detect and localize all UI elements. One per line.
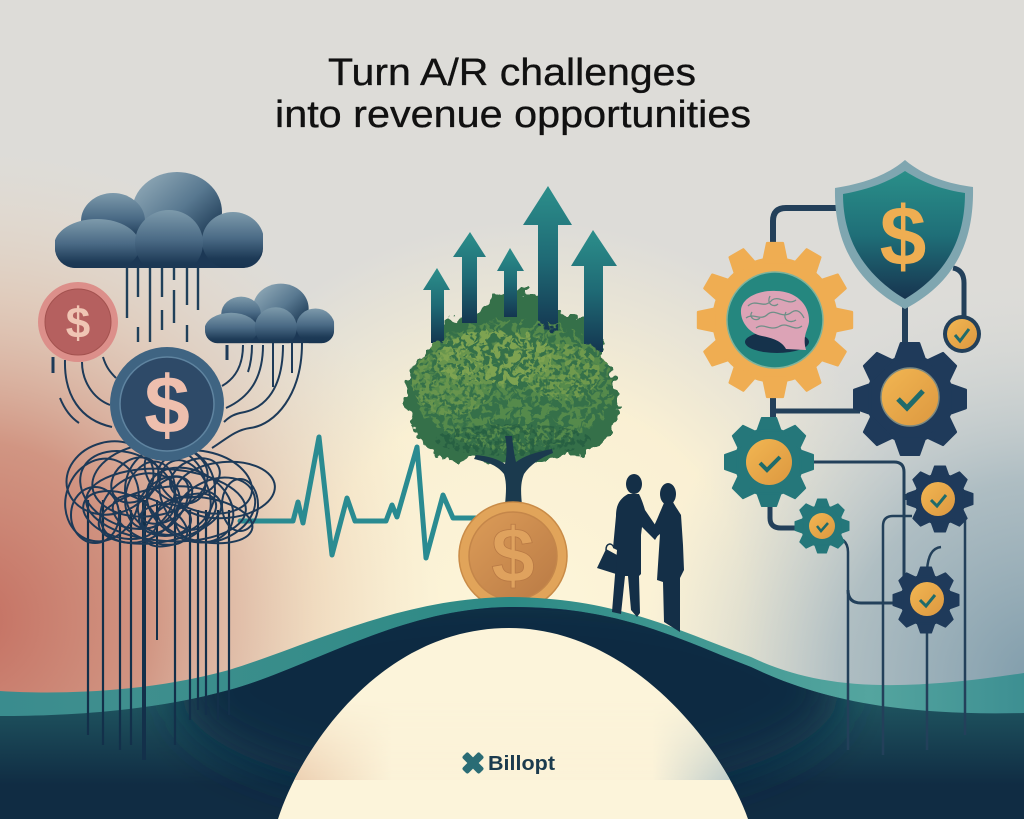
man [645, 483, 684, 632]
title [275, 52, 751, 136]
group: automation gears [698, 160, 981, 755]
vertical strings [88, 500, 229, 760]
connector wires [770, 208, 965, 755]
small teal check gear [795, 499, 849, 553]
rain under large cloud [127, 268, 198, 342]
group: debt tangle and clouds [38, 172, 335, 760]
icon: small storm cloud [204, 284, 335, 348]
growth arrows [423, 186, 617, 352]
icon: pink coin: $ [66, 299, 90, 348]
icon: gold coin: $ [491, 511, 535, 599]
tree canopy [405, 319, 618, 464]
title: Turn A/R challenges [328, 52, 696, 94]
icon: large navy coin [110, 347, 224, 461]
navy check gear [854, 343, 966, 455]
icon: logo cross [456, 746, 490, 780]
big brain gear [698, 243, 852, 397]
tree trunk [474, 436, 553, 505]
rolling hill [0, 580, 1024, 819]
canopy back [432, 290, 604, 388]
people silhouettes [597, 474, 684, 632]
scribble tangle [54, 432, 277, 557]
title: into revenue opportunities [275, 94, 751, 136]
icon: brain [741, 291, 809, 353]
heartbeat line [240, 437, 478, 558]
small check badge [943, 315, 981, 353]
logo: Billopt [456, 746, 555, 780]
icon: large navy coin: $ [144, 360, 190, 451]
teal band [0, 597, 1024, 730]
logo: Billopt: Billopt [488, 753, 555, 775]
icon: gold coin [459, 502, 567, 610]
navy hill body [0, 607, 1024, 819]
cream arch [270, 620, 760, 819]
hill dark core [168, 607, 854, 775]
group: tree with arrows [405, 186, 618, 610]
teal check gear [725, 418, 813, 506]
icon: large storm cloud [54, 172, 264, 276]
shield with dollar: $ [880, 189, 926, 283]
small navy check gear [907, 466, 973, 532]
curved wires [53, 343, 302, 448]
lower navy check gear [893, 567, 959, 633]
woman [597, 474, 660, 617]
icon: pink coin [38, 282, 118, 362]
shield with dollar [835, 160, 973, 309]
